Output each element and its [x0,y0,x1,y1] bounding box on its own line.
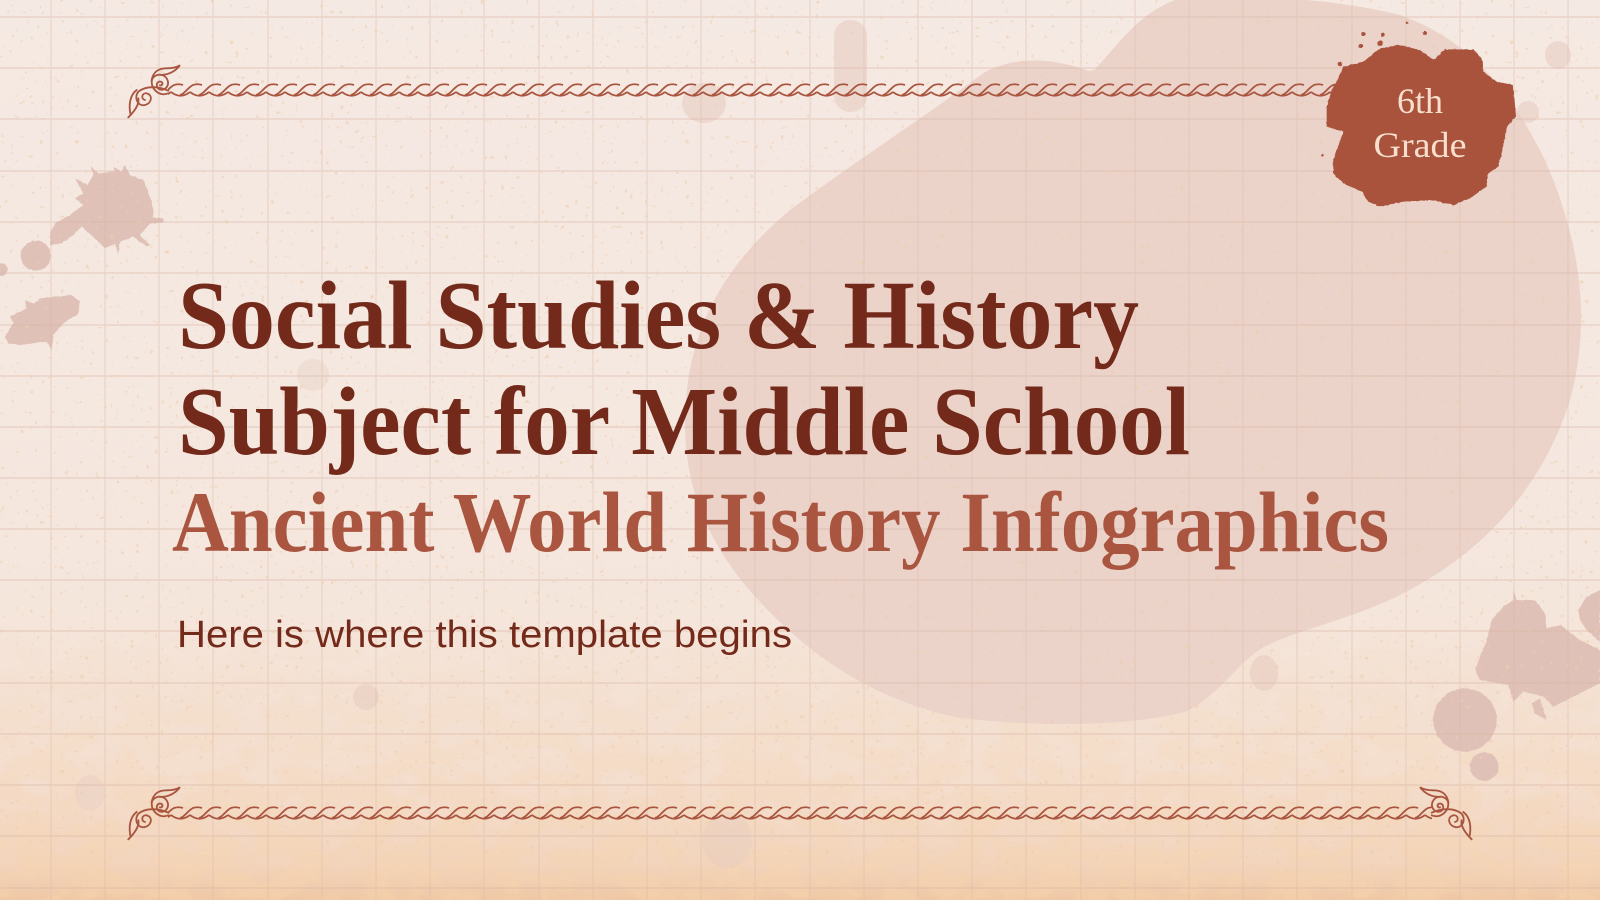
top ornamental border [128,65,1338,117]
bottom right corner flourish [1420,787,1472,839]
top left corner flourish [128,65,180,117]
ink splatter: top left [0,165,163,350]
subtitle: Here is where this template begins [177,614,792,656]
grade badge: Grade [1374,125,1466,165]
badge ink blot [1321,21,1516,207]
ink splatter: bottom right [1433,590,1600,781]
bottom ornamental border [128,787,1472,839]
title line 1: Social Studies & History [178,262,1139,370]
bottom paper stain [0,671,1600,900]
badge label: 6th [1397,81,1443,121]
title line 3: Ancient World History Infographics [172,474,1389,570]
title line 2: Subject for Middle School [178,368,1190,476]
grade badge [1321,21,1516,207]
bottom rope line [168,803,1432,821]
bottom left corner flourish [128,787,180,839]
title [172,262,1389,570]
large watercolor blob [685,0,1581,724]
top rope line [168,80,1338,98]
